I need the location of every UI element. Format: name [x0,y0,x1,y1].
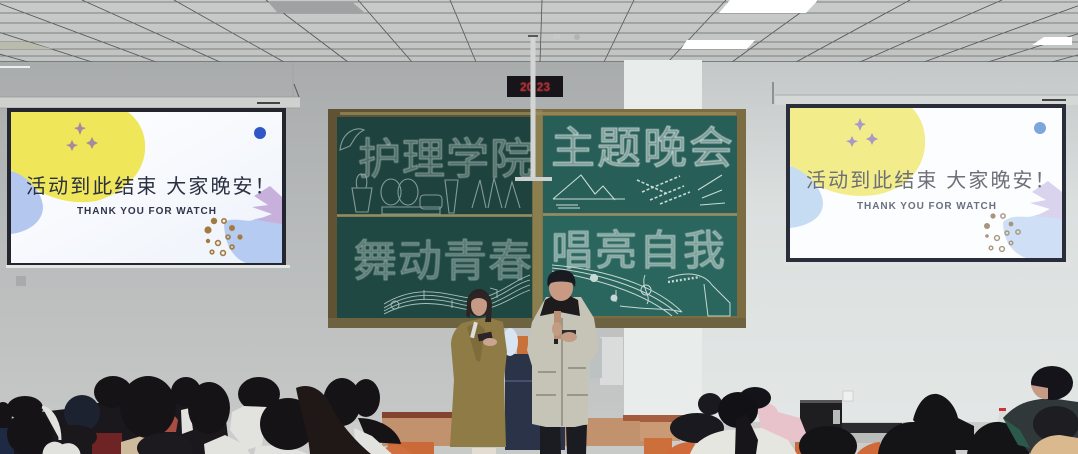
podium [505,336,565,450]
closing message: 活动到此结束 大家晚安！ [26,175,277,198]
blue blob right [1003,214,1062,258]
black speaker box [800,400,842,433]
music staff left [384,275,530,314]
audience right [640,366,1078,454]
centre divider [532,110,542,325]
microphone pole [515,34,580,181]
blue blob left [11,171,43,234]
ceiling [0,0,1078,63]
board panels [337,116,737,318]
dark seated mass [0,400,230,454]
navy hooded student [64,395,100,431]
chalk drawings left top [340,129,520,214]
sparkles [66,122,98,151]
clock: 20 23 [520,80,550,94]
logo badge [254,127,266,139]
closing message: 活动到此结束 大家晚安！ [806,169,1057,192]
white puffer jackets [181,406,392,454]
female host [450,289,507,454]
man with glasses [1003,366,1078,454]
audience left [0,376,434,454]
music staff right [552,265,730,316]
girl in tan coat [1030,406,1078,454]
male host [527,270,599,454]
balloon [502,328,518,356]
blackboard [328,109,746,328]
students front row [7,376,371,454]
chalk tray [328,318,746,328]
yellow blob [11,112,145,202]
projector housing right [773,82,1078,105]
logo badge [1034,122,1046,134]
stage floor and skirting [382,412,687,454]
yellow blob [790,108,925,196]
headphones and sleeve [42,407,79,454]
clock [507,76,563,97]
wall socket [843,391,853,401]
chalk title right top: 主题晚会 [551,124,735,173]
chalk title right bottom: 唱亮自我 [551,227,727,274]
board frame [328,109,746,328]
blue blob left [790,166,823,228]
pink jacket student [757,404,808,442]
dots [204,218,243,243]
wall panel [590,337,623,385]
left projection screen [6,108,290,268]
coloured clothes [92,408,178,454]
thank you line: THANK YOU FOR WATCH [857,201,997,212]
wall [0,60,1078,422]
blue blob right [224,217,282,263]
horizontal divider [337,214,737,216]
dots [984,213,1013,238]
white sweatshirt student [690,428,797,454]
bottle [997,408,1008,424]
students back row [0,376,401,444]
ceiling light panels [0,0,1072,49]
right projection screen [782,104,1070,265]
sparkles [846,118,878,147]
hand [1030,181,1062,219]
hand [252,186,282,224]
chalk title left bottom: 舞动青春 [353,237,533,286]
dark heads [799,394,1029,454]
dark jacket student [670,393,724,443]
chalk title left top: 护理学院 [358,136,534,184]
thank you line: THANK YOU FOR WATCH [77,206,217,217]
projector housing left [0,84,300,108]
chalk drawings right top [553,175,725,208]
